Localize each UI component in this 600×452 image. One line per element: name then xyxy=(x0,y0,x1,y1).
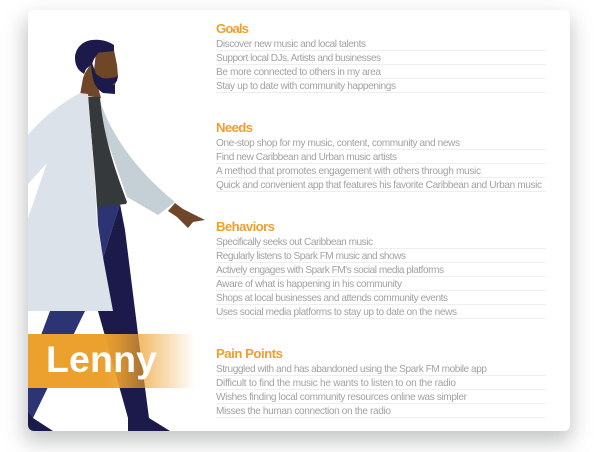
front leg and shoe xyxy=(98,204,170,431)
section: needs: A method that promotes engagement with others through music xyxy=(216,166,481,177)
front leg upper panel xyxy=(97,204,120,258)
section: needs: One-stop shop for my music, content, community and news xyxy=(216,138,460,149)
section: needs xyxy=(216,120,546,192)
neck xyxy=(80,62,101,98)
section: behaviors: Specifically seeks out Caribbean music xyxy=(216,237,373,248)
heading: needs: Needs xyxy=(216,120,253,135)
name: Lenny xyxy=(46,338,157,380)
shirt xyxy=(88,97,127,207)
section: goals: Support local DJs, Artists and businesses xyxy=(216,53,381,64)
section: goals xyxy=(216,21,546,92)
section: goals: Stay up to date with community happenings xyxy=(216,81,396,92)
section: pain points: Difficult to find the music he wants to listen to on the radio xyxy=(216,378,456,389)
coat fold xyxy=(28,163,47,218)
hair xyxy=(75,40,114,74)
back shoe xyxy=(28,412,53,431)
section: behaviors: Uses social media platforms to stay up to date on the news xyxy=(216,307,457,318)
section: behaviors: Actively engages with Spark FM's social media platforms xyxy=(216,265,444,276)
section: pain points: Struggled with and has abandoned using the Spark FM mobile app xyxy=(216,364,487,375)
face xyxy=(94,50,118,85)
beard xyxy=(91,60,118,94)
sleeve xyxy=(99,97,175,215)
heading: behaviors: Behaviors xyxy=(216,219,275,234)
heading: pain points: Pain Points xyxy=(216,346,283,361)
coat xyxy=(28,93,113,311)
back leg xyxy=(28,311,85,418)
section: pain points xyxy=(216,346,546,418)
section: pain points: Misses the human connection on the radio xyxy=(216,406,391,417)
heading: goals: Goals xyxy=(216,21,249,36)
section: goals: Be more connected to others in my area xyxy=(216,67,381,78)
section: behaviors xyxy=(216,219,546,318)
section: needs: Find new Caribbean and Urban music artists xyxy=(216,152,397,163)
section: goals: Discover new music and local talents xyxy=(216,39,366,50)
section: behaviors: Regularly listens to Spark FM music and shows xyxy=(216,251,406,262)
section: pain points: Wishes finding local community resources online was simpler xyxy=(216,392,468,403)
section: needs: Quick and convenient app that features his favorite Caribbean and Urban music xyxy=(216,180,542,191)
hand xyxy=(168,203,205,228)
name banner xyxy=(28,334,195,388)
section: behaviors: Shops at local businesses and attends community events xyxy=(216,293,448,304)
section: behaviors: Aware of what is happening in his community xyxy=(216,279,403,290)
figure: Lenny walking xyxy=(28,40,205,431)
